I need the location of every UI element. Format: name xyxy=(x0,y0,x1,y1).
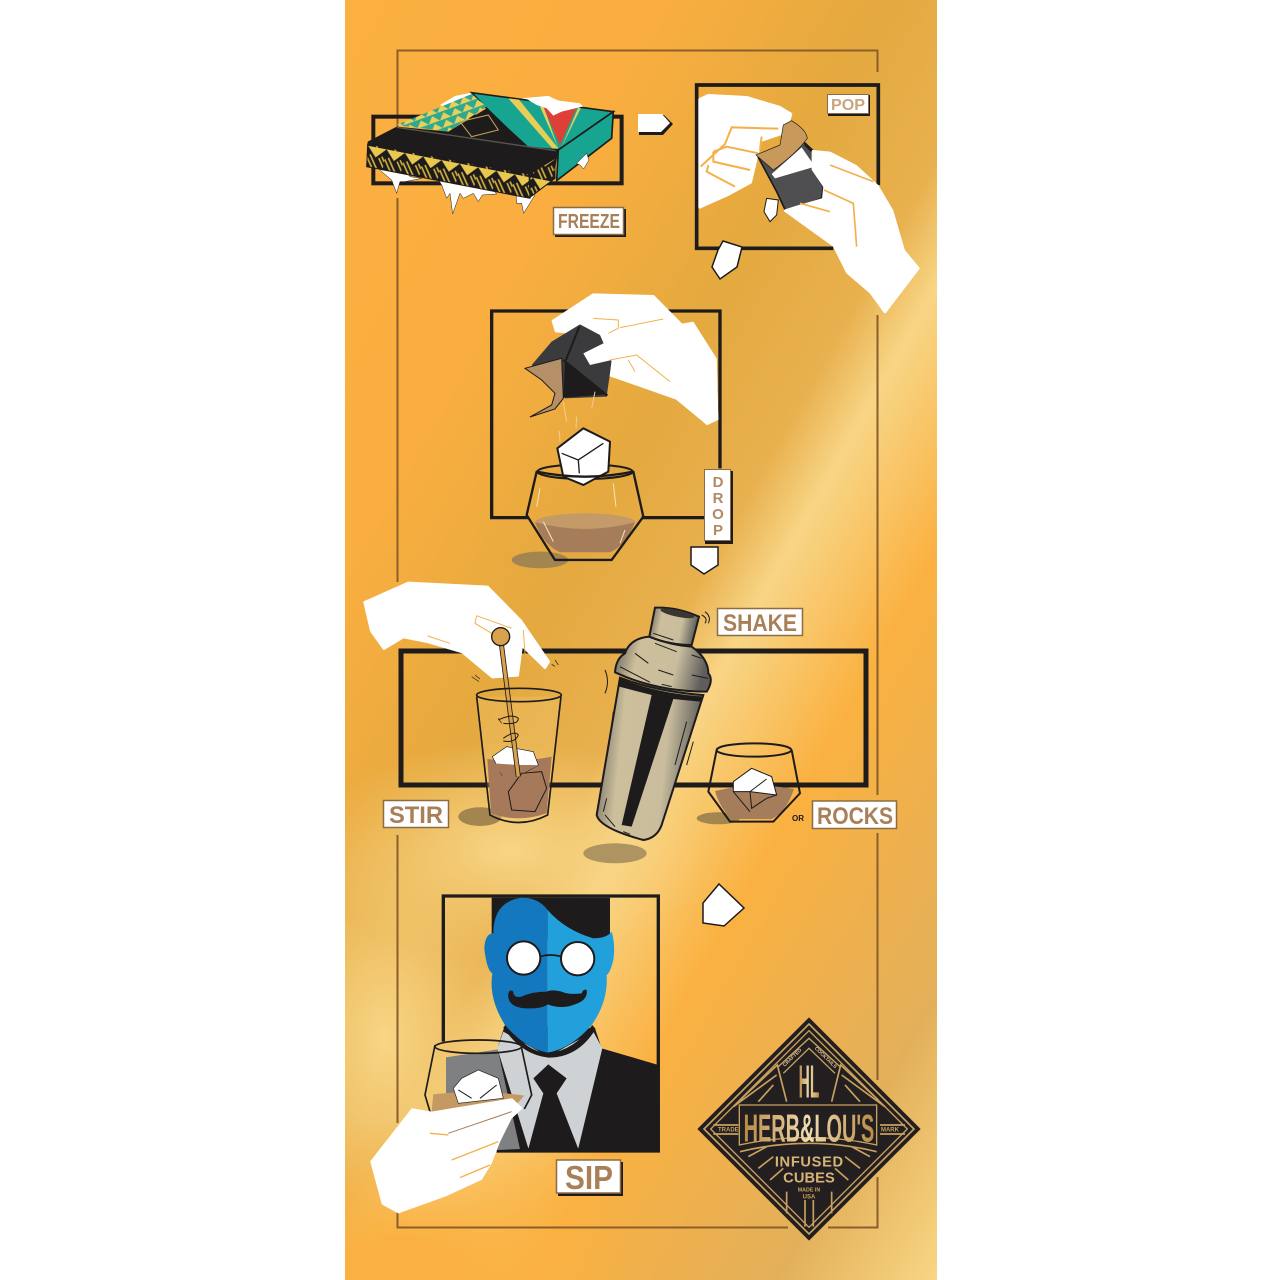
teal lid xyxy=(472,93,613,150)
shaker cap xyxy=(649,608,699,645)
logo chevron lines xyxy=(778,1038,840,1073)
patterned strip xyxy=(397,94,487,132)
arrow: shake to sip xyxy=(703,884,744,926)
logo usa: USA xyxy=(803,1194,816,1200)
shaker shoulder xyxy=(615,637,711,692)
collar xyxy=(503,1023,596,1058)
logo: Herb & Lou's diamond badge: HL xyxy=(799,1055,819,1107)
moustache xyxy=(508,990,587,1008)
silicone tray xyxy=(756,121,828,212)
rocks glass outline xyxy=(708,750,800,822)
teal box side xyxy=(557,112,613,181)
fingers over tray xyxy=(583,322,718,425)
gold background panel xyxy=(345,0,937,1280)
or text: OR xyxy=(792,814,804,823)
thin outer frame xyxy=(398,50,878,1228)
arrow face xyxy=(638,114,670,132)
step: stir illustration xyxy=(365,583,561,826)
shaker black stripe xyxy=(619,678,703,827)
light glow left xyxy=(345,800,645,1280)
held cube xyxy=(453,1070,503,1103)
ice drip over rays xyxy=(525,96,582,116)
tie xyxy=(528,1064,578,1149)
arrow: drop to stir xyxy=(691,547,718,574)
label: drop: O xyxy=(712,506,724,523)
arrow: freeze to pop xyxy=(639,115,673,135)
step: drop cube illustration xyxy=(492,295,720,568)
stir glass back xyxy=(477,697,561,822)
ice cubes xyxy=(492,747,547,812)
step: freeze box illustration xyxy=(367,93,622,214)
shaker shadow xyxy=(583,843,647,863)
label: pop: POP xyxy=(831,97,865,114)
logo cubes: CUBES xyxy=(783,1170,835,1186)
logo: Herb & Lou's diamond badge xyxy=(697,1017,921,1241)
cube xyxy=(557,428,610,485)
logo mark text: MARK xyxy=(881,1127,900,1133)
label: freeze xyxy=(554,208,626,237)
hand holding glass xyxy=(372,1100,521,1212)
rocks whiskey xyxy=(715,786,794,819)
glass back rim xyxy=(537,464,633,479)
label: rocks: ROCKS xyxy=(817,803,893,830)
glasses xyxy=(507,941,594,975)
logo name banner xyxy=(739,1105,877,1145)
logo wordmark: HERB&LOU'S xyxy=(744,1106,874,1150)
patterned sleeve front xyxy=(367,144,530,198)
face right half xyxy=(548,910,614,1053)
arrow: pop to drop xyxy=(712,241,742,279)
step: sip portrait illustration xyxy=(372,896,658,1212)
face left half xyxy=(484,898,548,1053)
step: pop tray illustration xyxy=(697,85,918,312)
logo infused: INFUSED xyxy=(775,1155,843,1171)
logo tagline right: COCKTAILS xyxy=(813,1046,838,1071)
logo sunburst lines xyxy=(713,1065,905,1227)
grey reflection behind glass xyxy=(446,1049,520,1150)
hand with stirrer xyxy=(365,583,549,677)
label: pop xyxy=(828,94,870,116)
logo trade mark: TRADE xyxy=(718,1127,739,1133)
logo made in: MADE IN xyxy=(798,1188,820,1194)
hair xyxy=(492,898,610,939)
logo tagline left: CRAFTED xyxy=(782,1047,804,1068)
falling motion lines xyxy=(559,392,595,442)
light glow center xyxy=(345,730,745,960)
stir glass outline xyxy=(477,697,561,822)
suit xyxy=(498,1025,658,1150)
step: cocktail shaker xyxy=(583,606,800,863)
small falling cube xyxy=(764,198,778,222)
glass body xyxy=(527,472,643,560)
held glass outline xyxy=(425,1045,532,1112)
whiskey liquid xyxy=(535,513,635,552)
shaker body xyxy=(597,678,703,840)
label: sip: SIP xyxy=(565,1159,613,1196)
label: drop: P xyxy=(713,522,723,539)
held whiskey xyxy=(432,1092,524,1112)
glass shadow xyxy=(512,552,568,568)
whiskey in stir glass xyxy=(487,757,552,818)
right hand xyxy=(785,151,918,312)
icicles xyxy=(375,153,589,214)
hand holding tray xyxy=(553,295,717,424)
ice on top of box xyxy=(440,93,583,115)
shirt xyxy=(497,1032,602,1148)
rocks cube xyxy=(733,768,777,812)
label: drop: R xyxy=(713,490,724,507)
lid rays xyxy=(508,98,581,148)
panel: stir and shake frame xyxy=(401,651,866,785)
black sleeve top xyxy=(368,108,558,176)
label: freeze: FREEZE xyxy=(558,211,620,233)
sleeve diamond xyxy=(460,115,498,137)
label: stir: STIR xyxy=(389,802,443,829)
rocks glass shadow xyxy=(697,812,740,824)
stirrer xyxy=(492,628,518,777)
label: drop: D xyxy=(713,474,724,491)
label: shake: SHAKE xyxy=(723,610,797,637)
left hand xyxy=(700,95,791,207)
stir glass shadow xyxy=(458,807,502,826)
orange glow bottom left xyxy=(345,1100,645,1280)
label: drop xyxy=(704,470,733,544)
motion marks and reflections xyxy=(603,612,709,834)
tray xyxy=(525,324,612,417)
